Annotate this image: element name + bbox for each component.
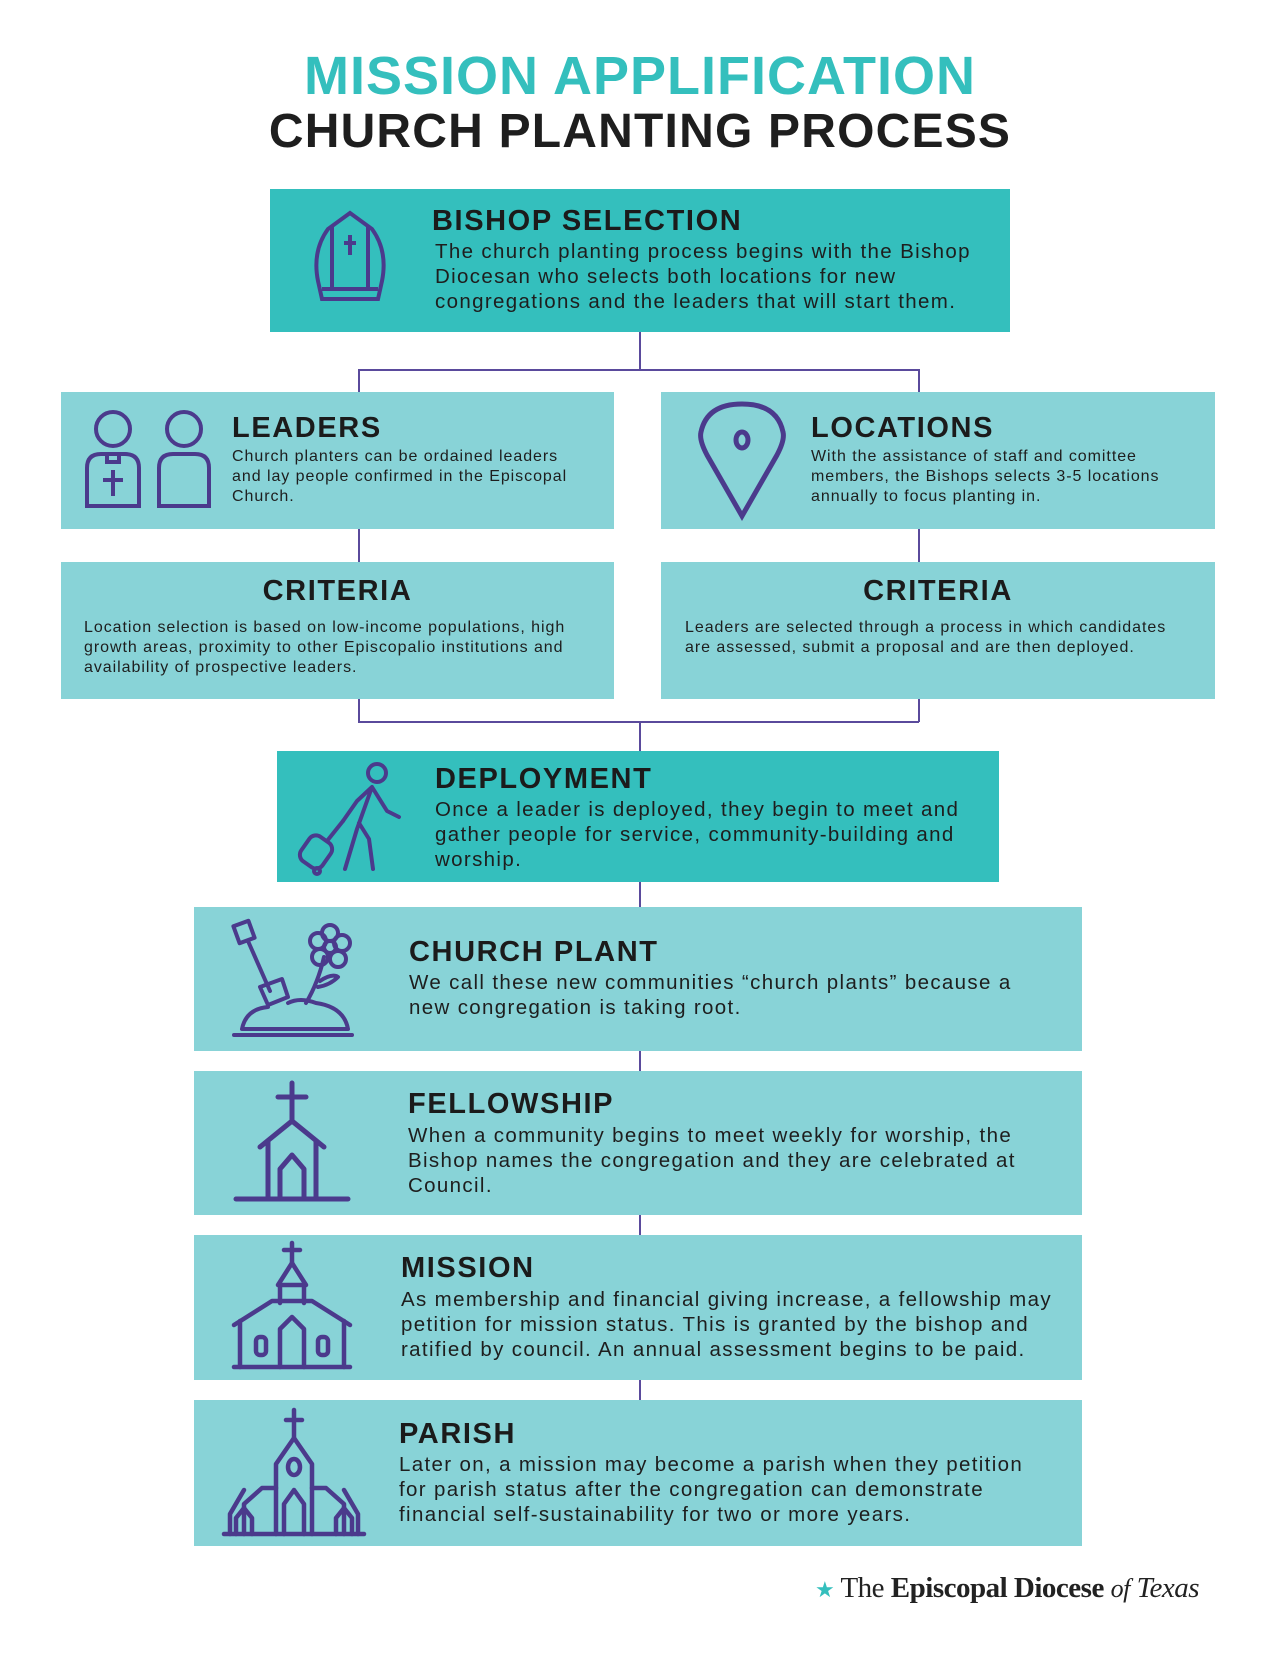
panel: criteria left: Location selection is based on low-income populations, high <box>84 619 565 636</box>
panel: deployment: worship. <box>435 848 522 871</box>
panel: church plant: new congregation is taking root. <box>409 996 742 1019</box>
panel: leaders: Church planters can be ordained leaders <box>232 448 558 465</box>
title: CHURCH PLANTING PROCESS <box>269 105 1011 158</box>
panel: deployment <box>277 751 999 882</box>
panel: leaders: LEADERS <box>232 412 382 444</box>
panel: mission <box>194 1235 1082 1380</box>
panel: bishop selection: Diocesan who selects both locations for new <box>435 265 896 288</box>
icon: map pin <box>698 402 786 521</box>
panel: criteria left <box>61 562 614 699</box>
panel: locations: LOCATIONS <box>811 412 994 444</box>
footer logo: ★ The Episcopal Diocese of Texas <box>815 1572 1199 1604</box>
panel: criteria left: availability of prospective leaders. <box>84 659 357 676</box>
panel: bishop selection: congregations and the leaders that will start them. <box>435 290 956 313</box>
panel: fellowship: When a community begins to meet weekly for worship, the <box>408 1124 1012 1147</box>
icon: shovel and flower <box>231 918 354 1037</box>
panel: criteria right: are assessed, submit a proposal and are then deployed. <box>685 639 1135 656</box>
panel: fellowship <box>194 1071 1082 1215</box>
panel: criteria left: growth areas, proximity to other Episcopalio institutions and <box>84 639 564 656</box>
panel: parish: financial self-sustainability for two or more years. <box>399 1503 911 1526</box>
panel: leaders: and lay people confirmed in the Episcopal <box>232 468 567 485</box>
connector lines <box>232 332 920 1500</box>
icon: cathedral <box>222 1408 366 1536</box>
panel: church plant <box>194 907 1082 1051</box>
icon: mitre <box>314 210 386 301</box>
panel: mission: petition for mission status. This is granted by the bishop and <box>401 1313 1029 1336</box>
panel: church plant: CHURCH PLANT <box>409 936 659 968</box>
panel: mission: ratified by council. An annual assessment begins to be paid. <box>401 1338 1026 1361</box>
panel: deployment: gather people for service, community-building and <box>435 823 955 846</box>
panel: deployment: DEPLOYMENT <box>435 763 652 795</box>
panel: locations: annually to focus planting in. <box>811 488 1041 505</box>
panel: bishop selection <box>270 189 1010 332</box>
panel: criteria right: CRITERIA <box>863 575 1013 607</box>
panel: parish: PARISH <box>399 1418 516 1450</box>
panel: bishop selection: BISHOP SELECTION <box>432 205 742 237</box>
panel: mission: As membership and financial giving increase, a fellowship may <box>401 1288 1052 1311</box>
panel: leaders: Church. <box>232 488 295 505</box>
panel: mission: MISSION <box>401 1252 535 1284</box>
panel: fellowship: FELLOWSHIP <box>408 1088 614 1120</box>
panel: criteria left: CRITERIA <box>263 575 412 607</box>
panel: deployment: Once a leader is deployed, they begin to meet and <box>435 798 959 821</box>
panel: criteria right: Leaders are selected through a process in which candidates <box>685 619 1166 636</box>
panel: church plant: We call these new communities “church plants” because a <box>409 971 1012 994</box>
panel: criteria right <box>661 562 1215 699</box>
panel: fellowship: Council. <box>408 1174 493 1197</box>
panel: parish: for parish status after the congregation can demonstrate <box>399 1478 984 1501</box>
panel: fellowship: Bishop names the congregation and they are celebrated at <box>408 1149 1016 1172</box>
panel: parish: Later on, a mission may become a parish when they petition <box>399 1453 1023 1476</box>
icon: traveler with luggage <box>298 762 402 876</box>
title <box>269 46 1011 158</box>
panel: parish <box>194 1400 1082 1546</box>
panel: locations: members, the Bishops selects 3-5 locations <box>811 468 1160 485</box>
panel: bishop selection: The church planting process begins with the Bishop <box>435 240 971 263</box>
icon: two people <box>85 410 211 508</box>
icon: small church <box>234 1080 350 1202</box>
icon: church with steeple <box>232 1240 352 1370</box>
panel: leaders <box>61 392 614 529</box>
title: MISSION APPLIFICATION <box>304 46 976 106</box>
panel: locations <box>661 392 1215 529</box>
panel: locations: With the assistance of staff and comittee <box>811 448 1137 465</box>
